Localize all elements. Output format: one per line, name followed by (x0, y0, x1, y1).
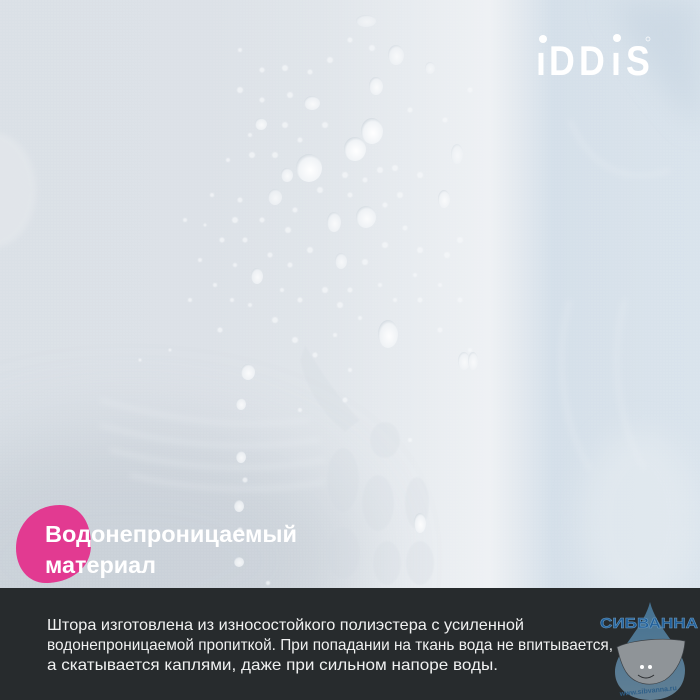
watermark: Sibvanna logo: СИБВАННА (600, 615, 698, 632)
caption text: Штора изготовлена из износостойкого полиэстера с усиленной (47, 617, 524, 634)
caption text: водонепроницаемой пропиткой. При попадании на ткань вода не впитывается, (47, 637, 613, 654)
water droplets (138, 15, 478, 585)
caption text: а скатывается каплями, даже при сильном напоре воды. (47, 657, 498, 674)
caption text (47, 617, 613, 674)
pink blob accent (16, 505, 91, 583)
heading: материал (45, 552, 156, 578)
watermark: Sibvanna logo (600, 602, 698, 700)
heading: Водонепроницаемый (45, 521, 297, 547)
logo: IDDIS: ıDDıS (536, 38, 650, 85)
watermark: Sibvanna logo: www.sibvanna.ru (618, 685, 677, 698)
heading (45, 521, 297, 578)
dark caption band (0, 588, 700, 700)
